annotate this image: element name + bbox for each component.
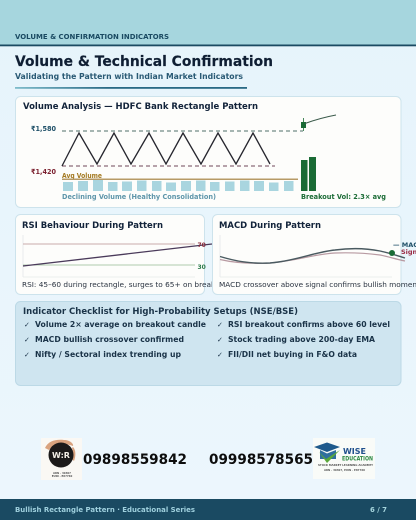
checklist item: MACD bullish crossover confirmed [35, 335, 184, 344]
support line [62, 165, 275, 167]
support price label: ₹1,420 [31, 168, 56, 176]
header band [0, 0, 416, 46]
MACD curve [220, 249, 405, 263]
resistance line [62, 130, 303, 132]
RSI line [23, 244, 212, 266]
subtitle: Validating the Pattern with Indian Market Indicators [15, 72, 243, 81]
70 label: 70 [198, 242, 206, 249]
logo: WR [41, 438, 82, 480]
signal curve [220, 253, 405, 263]
logo: WR: EUIN · E87760 [52, 474, 72, 478]
phone number: 09998578565 [209, 452, 313, 468]
breakout candle [301, 118, 306, 131]
hands [45, 440, 73, 450]
panel: RSI [16, 214, 213, 294]
checklist item: ✓ [217, 336, 223, 344]
panel heading: Volume Analysis — HDFC Bank Rectangle Pattern [23, 102, 258, 112]
checklist item: ✓ [217, 321, 223, 329]
title: Volume & Technical Confirmation [15, 54, 273, 70]
checklist item: RSI breakout confirms above 60 level [228, 320, 390, 329]
panel: volume analysis [16, 96, 401, 208]
RSI heading: RSI Behaviour During Pattern [22, 221, 163, 231]
logo: Wise Education: ARN · 30307, EUIN · E87760 [324, 468, 365, 472]
footer bar [0, 499, 416, 520]
checklist item: ✓ [24, 321, 30, 329]
phone number: 09898559842 [83, 452, 187, 468]
checklist item: ✓ [217, 351, 223, 359]
checklist item: Nifty / Sectoral index trending up [35, 350, 181, 359]
logo: Wise Education: EDUCATION [342, 456, 373, 462]
checklist item: Stock trading above 200-day EMA [228, 335, 376, 344]
checklist item: Volume 2× average on breakout candle [35, 320, 207, 329]
checklist item: ✓ [24, 351, 30, 359]
panel: indicator checklist [16, 302, 401, 386]
average volume label: Avg Volume [62, 172, 102, 180]
post-breakout line [305, 115, 336, 124]
footer series text: Bullish Rectangle Pattern · Educational Series [15, 505, 195, 514]
panel: MACD [212, 214, 416, 294]
logo: WR: ARN · 30307 [53, 471, 71, 475]
RSI caption: RSI: 45–60 during rectangle, surges to 65+ on breal [22, 280, 213, 289]
logo: Wise Education [313, 438, 375, 479]
price zigzag [62, 133, 270, 166]
check mark [319, 450, 340, 463]
declining volume caption: Declining Volume (Healthy Consolidation) [62, 193, 216, 201]
30 label: 30 [198, 264, 206, 271]
crossover dot [389, 250, 395, 256]
declining volume bars [63, 180, 294, 191]
resistance price label: ₹1,580 [31, 125, 56, 133]
title rule [15, 87, 247, 89]
logo: WR: W:R [52, 451, 70, 460]
breakout volume bars [301, 157, 316, 191]
MACD chart [220, 235, 416, 277]
average volume line [62, 178, 298, 180]
checklist heading: Indicator Checklist for High-Probability Setups (NSE/BSE) [23, 307, 298, 317]
logo: Wise Education: WISE [343, 447, 366, 456]
graduation cap [314, 442, 340, 452]
checklist item: ✓ [24, 336, 30, 344]
MACD heading: MACD During Pattern [219, 221, 321, 231]
logo: Wise Education: STOCK MARKET LEARNING ACADEMY [318, 463, 373, 467]
page number: 6 / 7 [370, 505, 387, 514]
RSI chart [23, 235, 212, 277]
checklist item: FII/DII net buying in F&O data [228, 350, 357, 359]
section label: VOLUME & CONFIRMATION INDICATORS [15, 33, 169, 41]
breakout volume caption: Breakout Vol: 2.3× avg [301, 193, 386, 201]
